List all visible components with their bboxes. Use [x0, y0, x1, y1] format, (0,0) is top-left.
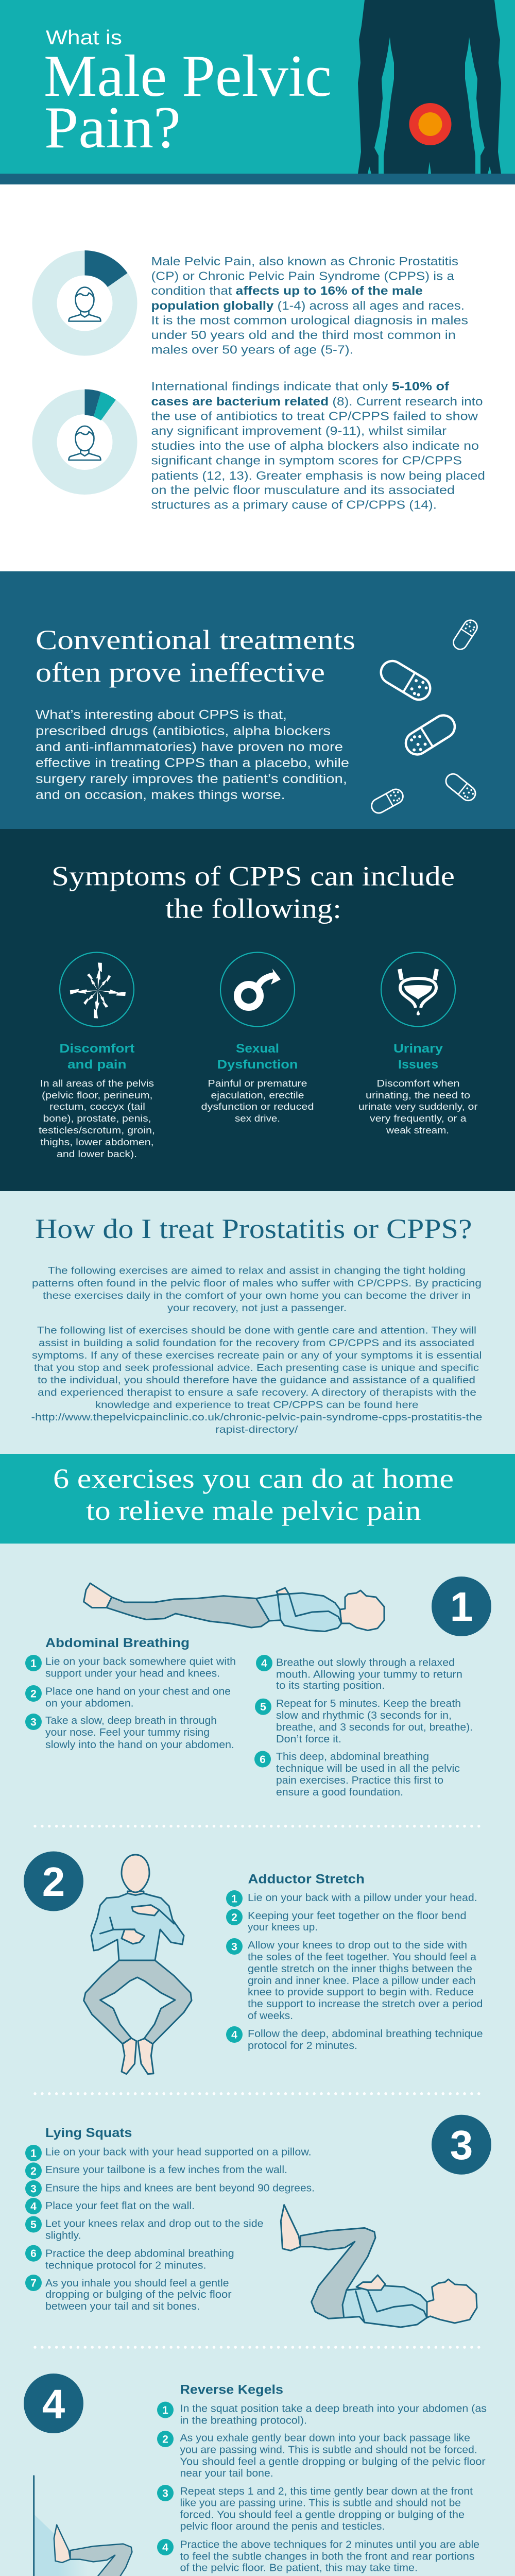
step 4: mouth. Allowing your tummy to return — [276, 1669, 462, 1680]
step 6: technique protocol for 2 minutes. — [45, 2260, 206, 2272]
symptom: sexual dysfunction: Painful or premature — [208, 1078, 307, 1089]
symptom: discomfort and pain: and lower back). — [57, 1149, 137, 1159]
step 2: Keeping your feet together on the floor bend — [248, 1910, 467, 1922]
symptom: sexual dysfunction: dysfunction or reduced — [201, 1101, 314, 1112]
step 3 — [25, 1714, 234, 1751]
step 4: Follow the deep, abdominal breathing technique — [248, 2028, 483, 2040]
step 6 — [254, 1751, 460, 1798]
text block: definition: Male Pelvic Pain, also known as Chronic Prostatitis — [151, 255, 458, 268]
step 6: 6 — [260, 1754, 266, 1766]
heading — [52, 861, 455, 924]
step 3: forced. You should feel a gentle dropping or bulging of the — [180, 2509, 465, 2520]
text block: these exercises daily in the comfort of your own home you can become the driver in — [43, 1291, 471, 1301]
step 1: 1 — [30, 2147, 37, 2160]
step 1 — [226, 1890, 477, 1907]
step 3: Allow your knees to drop out to the side with — [248, 1940, 467, 1951]
text block: findings — [151, 380, 485, 512]
text block: assist in building a solid foundation for the recovery from CP/CPPS and its associated — [39, 1338, 474, 1349]
illustration: figure at wall — [34, 2476, 216, 2576]
symptom: urinary issues: weak stream. — [386, 1125, 449, 1136]
number badge 4 — [24, 2374, 83, 2433]
text block: findings: the use of antibiotics to treat CP/CPPS failed to show — [151, 409, 478, 422]
step 1 — [25, 2145, 312, 2161]
step 4: 4 — [30, 2201, 37, 2212]
symptom: urinary issues: Urinary — [393, 1042, 443, 1056]
step 1: Lie on your back somewhere quiet with — [45, 1656, 236, 1667]
step 1: 1 — [30, 1658, 37, 1669]
number badge 3: 3 — [450, 2122, 473, 2168]
step 3: your nose. Feel your tummy rising — [45, 1727, 210, 1738]
panel: exercises — [0, 1544, 515, 2576]
text block: definition: population globally (1-4) across all ages and races. — [151, 299, 465, 312]
step 3: slowly into the hand on your abdomen. — [45, 1739, 234, 1751]
step 7 — [25, 2275, 232, 2312]
number badge 1 — [432, 1577, 491, 1636]
text block: definition: under 50 years old and the third most common in — [151, 328, 456, 342]
step 2: 2 — [30, 1688, 37, 1700]
step 2: 2 — [30, 2165, 37, 2177]
step 1 — [157, 2402, 487, 2426]
step 3: 3 — [162, 2487, 168, 2500]
exercise title: Lying Squats — [45, 2126, 132, 2140]
step 3: like you are passing urine. This is subtle and should not be — [180, 2497, 461, 2509]
icons: pills — [369, 618, 480, 816]
text block: your recovery, not just a passenger. — [167, 1303, 347, 1314]
panel: header — [0, 0, 515, 184]
text block: knowledge and experience to treat CP/CPPS can be found here — [95, 1400, 418, 1411]
text block: findings: cases are bacterium related (8). Current research into — [151, 395, 483, 408]
symptom: discomfort and pain — [39, 952, 155, 1159]
step 3: Ensure the hips and knees are bent beyond 90 degrees. — [45, 2183, 315, 2194]
step 4 — [25, 2198, 195, 2214]
symptom: urinary issues: Issues — [398, 1058, 438, 1072]
text block: -http://www.thepelvicpainclinic.co.uk/chronic-pelvic-pain-syndrome-cpps-prostatitis-the — [31, 1412, 482, 1423]
step 3: the soles of the feet together. You should feel a — [248, 1952, 477, 1963]
text block: definition: males over 50 years of age (5-7). — [151, 343, 353, 357]
text block: and experienced therapist to ensure a safe recovery. A directory of therapists with the — [38, 1387, 476, 1398]
step 2: you are passing wind. This is subtle and should not be forced. — [180, 2444, 477, 2455]
symptom: discomfort and pain: testicles/scrotum, groin, — [39, 1125, 155, 1136]
text block: findings: any significant improvement (9-11), whilst similar — [151, 424, 447, 437]
chart: donut 5-10 percent — [44, 389, 125, 482]
step 3: 3 — [30, 1717, 37, 1728]
step 6: technique will be used in all the pelvic — [276, 1763, 460, 1774]
step 3: knee to provide support to begin with. Reduce — [248, 1987, 474, 1998]
symptom: discomfort and pain: thighs, lower abdomen, — [40, 1137, 153, 1147]
step 1: support under your head and knees. — [45, 1668, 220, 1680]
step 5: 5 — [30, 2219, 37, 2231]
number badge 3 — [432, 2115, 491, 2175]
symptom: urinary issues: very frequently, or a — [370, 1113, 467, 1124]
step 2: on your abdomen. — [45, 1698, 134, 1709]
symptom: urinary issues: urinate very suddenly, or — [358, 1101, 478, 1112]
text block: findings: significant change in symptom scores for CP/CPPS — [151, 454, 462, 467]
icon: male symbol — [220, 952, 295, 1026]
step 1: Lie on your back with your head supported on a pillow. — [45, 2147, 312, 2158]
step 4: 4 — [231, 2029, 237, 2041]
heading: Symptoms of CPPS can include — [52, 861, 455, 892]
step 4: 4 — [261, 1658, 267, 1669]
step 3: 3 — [231, 1941, 237, 1953]
exercise title: Abdominal Breathing — [45, 1636, 190, 1650]
text block: effective in treating CPPS than a placebo, while — [36, 756, 349, 770]
panel: exercises heading — [0, 1454, 515, 1544]
step 7: 7 — [30, 2277, 37, 2290]
number badge 2 — [24, 1852, 83, 1911]
step 5 — [255, 1698, 473, 1745]
step 6: ensure a good foundation. — [276, 1787, 403, 1798]
step 4: protocol for 2 minutes. — [248, 2040, 357, 2052]
step 3: pelvic floor around the penis and testicles. — [180, 2521, 385, 2532]
heading: to relieve male pelvic pain — [86, 1495, 421, 1526]
step 2: your knees up. — [248, 1922, 318, 1933]
symptom: discomfort and pain: In all areas of the pelvis — [40, 1078, 154, 1089]
symptom: urinary issues: Discomfort when — [377, 1078, 459, 1089]
title: Pain? — [44, 95, 181, 161]
step 3: the support to increase the stretch over a period — [248, 1998, 483, 2010]
step 6: Practice the deep abdominal breathing — [45, 2248, 234, 2260]
step 3 — [226, 1938, 483, 2022]
text block: definition: It is the most common urological diagnosis in males — [151, 313, 468, 327]
step 1: in the breathing protocol). — [180, 2415, 307, 2426]
step 2: Place one hand on your chest and one — [45, 1686, 231, 1698]
step 6: pain exercises. Practice this first to — [276, 1775, 443, 1786]
step 6 — [25, 2245, 234, 2272]
text block: prescribed drugs (antibiotics, alpha blockers — [36, 724, 331, 738]
panel: prevalence — [0, 184, 515, 571]
step 4 — [256, 1655, 462, 1691]
exercise title: Reverse Kegels — [180, 2383, 283, 2397]
panel: symptoms — [0, 829, 515, 1191]
icon: pain target — [409, 103, 451, 145]
step 5: Let your knees relax and drop out to the side — [45, 2218, 264, 2230]
text block: The following list of exercises should be done with gentle care and attention. They will — [37, 1326, 476, 1336]
heading: 6 exercises you can do at home — [53, 1463, 454, 1494]
step 7: dropping or bulging of the pelvic floor — [45, 2289, 232, 2300]
step 3: groin and inner knee. Place a pillow under each — [248, 1975, 476, 1987]
step 2 — [157, 2431, 486, 2479]
exercise 4: reverse kegels — [24, 2374, 487, 2576]
title — [44, 27, 332, 161]
number badge 2: 2 — [42, 1859, 65, 1905]
text block: The following exercises are aimed to relax and assist in changing the tight holding — [48, 1266, 466, 1277]
symptom: discomfort and pain: bone), prostate, penis, — [43, 1113, 151, 1124]
symptom: urinary issues: urinating, the need to — [366, 1090, 470, 1100]
step 5: 5 — [260, 1701, 266, 1713]
text block: definition: condition that affects up to 16% of the male — [151, 284, 423, 297]
symptom: discomfort and pain: rectum, coccyx (tail — [49, 1101, 145, 1112]
symptom: urinary issues — [358, 952, 478, 1136]
symptom: discomfort and pain: Discomfort — [59, 1042, 134, 1056]
icon: bladder — [381, 952, 455, 1026]
step 4: to feel the subtle changes in both the front and rear portions — [180, 2551, 475, 2562]
text block: and on occasion, makes things worse. — [36, 788, 285, 802]
panel: conventional treatments — [0, 571, 515, 829]
step 3: of weeks. — [248, 2010, 293, 2022]
step 7: As you inhale you should feel a gentle — [45, 2278, 229, 2289]
step 4 — [157, 2539, 479, 2574]
number badge 1: 1 — [450, 1584, 473, 1630]
text block: findings: studies into the use of alpha blockers also indicate no — [151, 439, 479, 452]
step 4: Practice the above techniques for 2 minutes until you are able — [180, 2539, 479, 2550]
icon: pain burst — [60, 952, 134, 1026]
text block: patterns often found in the pelvic floor of males who suffer with CP/CPPS. By practicing — [32, 1278, 482, 1289]
text block: to the individual, you should therefore have the guidance and assistance of a qualified — [38, 1375, 475, 1386]
step 3: 3 — [30, 2183, 37, 2195]
heading: the following: — [165, 893, 341, 924]
exercise title: Adductor Stretch — [248, 1872, 365, 1887]
text block: findings: structures as a primary cause of CP/CPPS (14). — [151, 498, 437, 512]
heading — [53, 1463, 454, 1526]
illustration: lying squat figure — [281, 2205, 477, 2327]
symptom: sexual dysfunction: Dysfunction — [217, 1058, 298, 1072]
number badge 4: 4 — [42, 2381, 65, 2427]
symptom: sexual dysfunction: ejaculation, erectile — [211, 1090, 304, 1100]
step 4: to its starting position. — [276, 1680, 385, 1691]
step 5: slow and rhythmic (3 seconds for in, — [276, 1710, 452, 1721]
step 2: You should feel a gentle dropping or bulging of the pelvic floor — [180, 2456, 486, 2467]
step 6: This deep, abdominal breathing — [276, 1751, 429, 1762]
step 2 — [25, 1685, 231, 1709]
step 1: Lie on your back with a pillow under your head. — [248, 1892, 477, 1904]
title: Male Pelvic — [44, 43, 332, 109]
text block: and anti-inflammatories) have proven no more — [36, 740, 343, 754]
step 4 — [226, 2026, 483, 2052]
step 5: slightly. — [45, 2230, 81, 2241]
text block: findings: on the pelvic floor musculature and its associated — [151, 483, 455, 497]
exercise 3: lying squats — [25, 2115, 491, 2327]
step 3: Repeat steps 1 and 2, this time gently bear down at the front — [180, 2486, 473, 2497]
illustration: lying figure — [84, 1583, 384, 1631]
step 4: of the pelvic floor. Be patient, this may take time. — [180, 2563, 418, 2574]
step 2 — [226, 1909, 467, 1933]
step 3 — [157, 2485, 473, 2532]
symptom: discomfort and pain: and pain — [67, 1058, 127, 1072]
step 2: near your tail bone. — [180, 2468, 273, 2479]
heading: How do I treat Prostatitis or CPPS? — [35, 1213, 472, 1244]
step 4: Place your feet flat on the wall. — [45, 2200, 195, 2212]
chart: donut 16 percent — [44, 250, 128, 343]
heading: Conventional treatments — [36, 624, 355, 655]
step 5: Don’t force it. — [276, 1734, 341, 1745]
step 1: 1 — [162, 2404, 168, 2416]
symptom: sexual dysfunction: Sexual — [236, 1042, 279, 1056]
text block — [36, 708, 349, 802]
heading — [36, 624, 355, 688]
step 2: Ensure your tailbone is a few inches from the wall. — [45, 2164, 287, 2176]
step 4: 4 — [162, 2542, 168, 2553]
text block: rapist-directory/ — [215, 1425, 298, 1435]
text block: findings: patients (12, 13). Greater emphasis is now being placed — [151, 469, 485, 482]
step 2 — [25, 2162, 287, 2179]
symptom: sexual dysfunction — [201, 952, 314, 1124]
exercise 1: abdominal breathing — [25, 1577, 491, 1798]
panel: how do I treat — [0, 1191, 515, 1454]
step 2: 2 — [162, 2434, 168, 2445]
text block: definition: (CP) or Chronic Pelvic Pain Syndrome (CPPS) is a — [151, 269, 454, 283]
text block: symptoms. If any of these exercises recreate pain or any of your symptoms it is essential — [32, 1350, 482, 1361]
title: What is — [46, 27, 122, 49]
step 3 — [25, 2180, 315, 2197]
step 1 — [25, 1655, 236, 1680]
step 3: gentle stretch on the inner thighs between the — [248, 1963, 472, 1975]
text block — [31, 1266, 482, 1435]
text block: What’s interesting about CPPS is that, — [36, 708, 287, 722]
exercise 2: adductor stretch — [24, 1852, 483, 2074]
step 3: Take a slow, deep breath in through — [45, 1715, 217, 1726]
step 4: Breathe out slowly through a relaxed — [276, 1657, 455, 1668]
step 5: Repeat for 5 minutes. Keep the breath — [276, 1698, 461, 1709]
step 2: 2 — [231, 1911, 237, 1924]
illustration: male body silhouette — [358, 0, 501, 174]
text block: definition — [151, 255, 468, 357]
step 5 — [25, 2216, 264, 2241]
step 1: 1 — [231, 1893, 237, 1905]
text block: surgery rarely improves the patient’s condition, — [36, 772, 347, 786]
illustration: seated figure — [84, 1855, 192, 2074]
symptom: discomfort and pain: (pelvic floor, perineum, — [42, 1090, 152, 1100]
symptom: sexual dysfunction: sex drive. — [235, 1113, 280, 1124]
text block: findings: International findings indicate that only 5-10% of — [151, 380, 449, 393]
step 1: In the squat position take a deep breath into your abdomen (as — [180, 2403, 487, 2414]
step 2: As you exhale gently bear down into your back passage like — [180, 2433, 470, 2444]
text block: that you stop and seek professional advice. Each presenting case is unique and specific — [34, 1363, 479, 1374]
step 7: between your tail and sit bones. — [45, 2301, 200, 2312]
step 5: breathe, and 3 seconds for out, breathe). — [276, 1722, 473, 1733]
step 6: 6 — [30, 2248, 37, 2260]
heading: often prove ineffective — [36, 657, 325, 688]
